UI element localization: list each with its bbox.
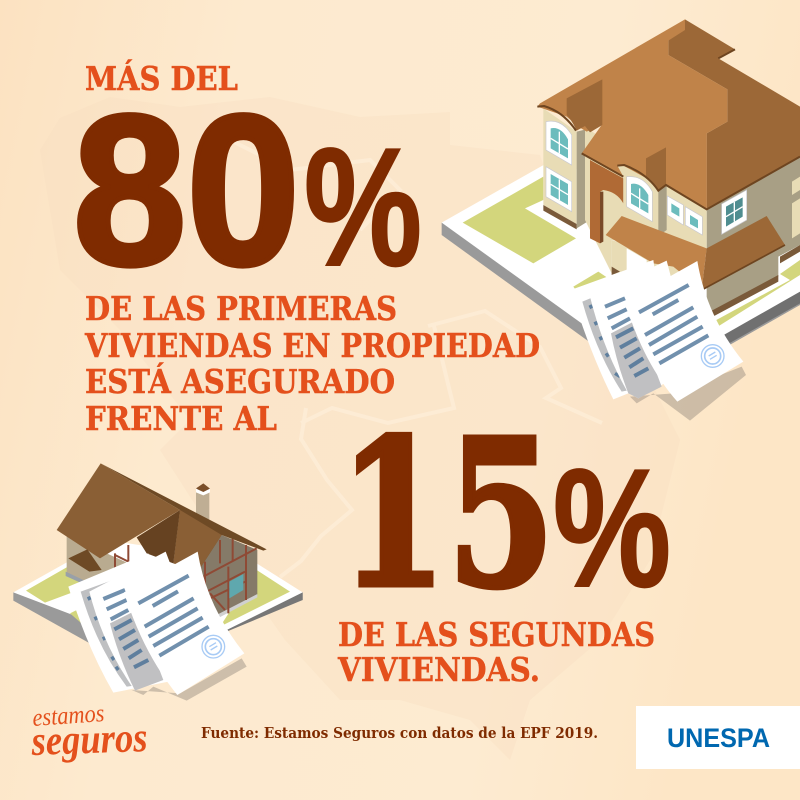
document: front page — [625, 261, 743, 402]
platform — [13, 540, 303, 658]
logo: estamos seguros: estamos — [32, 700, 105, 732]
world map watermark — [40, 97, 680, 760]
text block: segundas viviendas: DE LAS SEGUNDAS — [338, 615, 655, 654]
text block: segundas viviendas: VIVIENDAS. — [337, 650, 540, 689]
text block: primeras viviendas — [84, 289, 540, 438]
document: front page — [124, 552, 244, 695]
source note: Fuente: Estamos Seguros con datos de la EPF 2019. — [201, 724, 598, 742]
document: middle page — [89, 552, 207, 691]
illustration: large house with documents — [442, 19, 800, 421]
logo: estamos seguros — [30, 700, 148, 765]
document shadow — [630, 367, 746, 421]
cottage walls — [66, 483, 257, 621]
text block: segundas viviendas — [337, 615, 655, 689]
logo: unespa — [636, 706, 800, 769]
cottage roof — [57, 463, 267, 572]
roof — [537, 19, 800, 290]
logo: unespa: UNESPA — [667, 723, 770, 753]
window muntins — [551, 132, 743, 222]
text block: primeras viviendas: FRENTE AL — [85, 399, 277, 438]
big number: 80%: 80 — [73, 71, 300, 310]
window panes — [551, 128, 743, 228]
document: back page — [68, 553, 177, 693]
text block: primeras viviendas: DE LAS PRIMERAS — [85, 289, 397, 328]
house walls — [543, 108, 800, 320]
windows — [546, 121, 747, 235]
text block: primeras viviendas: VIVIENDAS EN PROPIEDAD — [84, 326, 540, 365]
big number: 15%: 15 — [339, 394, 555, 633]
text block: primeras viviendas: ESTÁ ASEGURADO — [85, 361, 395, 401]
logo: estamos seguros: seguros — [30, 715, 148, 765]
heading: más del: MÁS DEL — [85, 58, 238, 98]
big number: 80% — [73, 71, 422, 310]
illustration: small house with documents — [13, 463, 303, 701]
document shadow — [132, 658, 247, 701]
document: middle page — [590, 261, 693, 398]
document: back page — [571, 260, 670, 399]
big number: 80%: % — [304, 113, 422, 301]
big number: 15%: % — [553, 434, 671, 622]
platform — [442, 161, 800, 388]
